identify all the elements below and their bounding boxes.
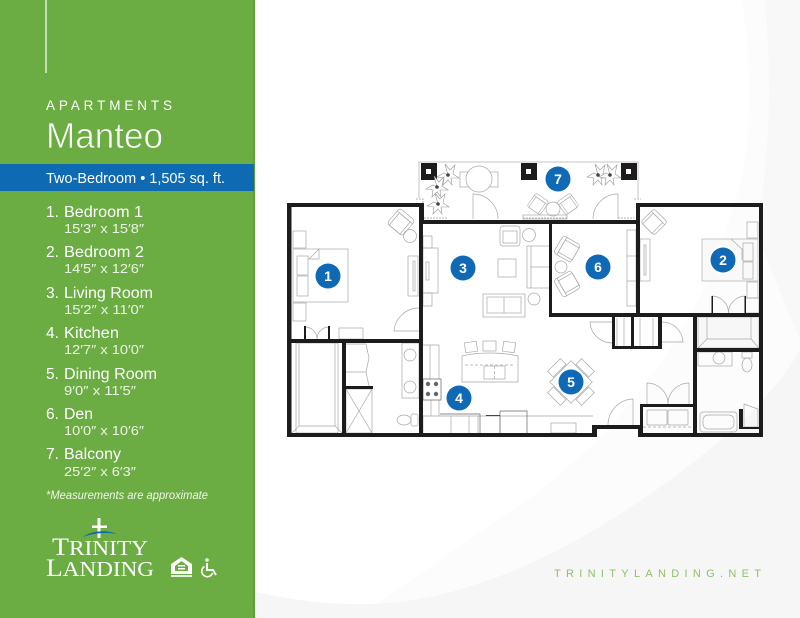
band: unit type: Two-Bedroom • 1,505 sq. ft.: [46, 171, 225, 187]
badge 3: 3: [459, 260, 467, 276]
second bathroom: [698, 317, 759, 432]
bedroom 2 and right walls: [636, 203, 763, 437]
badge 2: [709, 246, 737, 274]
badge 7: [544, 165, 572, 193]
balcony table: [460, 166, 498, 192]
room 5: Dining Room: [64, 366, 157, 383]
living room furniture: [423, 226, 550, 317]
room 6: Den: [64, 406, 93, 423]
bottom walls: [287, 404, 763, 437]
balcony outline: [419, 162, 638, 198]
badge 5: [557, 368, 585, 396]
badge 1: [314, 262, 342, 290]
bedroom 1 furniture: [293, 208, 419, 339]
badge 6: [584, 253, 612, 281]
badge 1: 1: [324, 268, 332, 284]
logo: Trinity Landing: TRINITY: [52, 534, 148, 561]
room 3: Living Room: [64, 285, 153, 302]
room 3: [46, 285, 153, 317]
room 5: 9′0″ x 11′5″: [64, 384, 137, 398]
band: unit type: [0, 164, 254, 191]
room 7: Balcony: [64, 446, 121, 463]
room 4: 4.: [46, 325, 59, 342]
room 4: Kitchen: [64, 325, 119, 342]
background swoosh: bottom: [255, 350, 800, 618]
kitchen island with stools: [462, 341, 518, 382]
accent line: [45, 0, 47, 73]
heading: Manteo: Manteo: [46, 115, 163, 156]
living and den walls: [420, 203, 763, 317]
panel: green sidebar: [0, 0, 255, 618]
balcony doors: [473, 194, 618, 219]
list: room dimensions: [46, 204, 157, 479]
kitchen: [423, 345, 593, 433]
heading: apartments: APARTMENTS: [46, 98, 172, 113]
room 6: 10′0″ x 10′6″: [64, 424, 145, 438]
closet walls: [612, 316, 662, 349]
badge 7: 7: [554, 171, 562, 187]
room 1: 15′3″ x 15′8″: [64, 222, 145, 236]
icon: wheelchair: [202, 558, 216, 577]
badge 2: 2: [719, 252, 727, 268]
range: [423, 379, 441, 400]
background swoosh: upper right light band: [373, 0, 800, 618]
badge 3: [449, 254, 477, 282]
room 2: 2.: [46, 244, 59, 261]
room 5: 5.: [46, 366, 59, 383]
logo: Trinity Landing: LANDING: [46, 555, 154, 582]
icon: equal housing: [171, 557, 192, 577]
footnote: *Measurements are approximate: [46, 488, 208, 502]
room 6: 6.: [46, 406, 59, 423]
room 1: 1.: [46, 204, 59, 221]
room 1: Bedroom 1: [64, 204, 143, 221]
badge 4: 4: [455, 390, 463, 406]
room 2: Bedroom 2: [64, 244, 144, 261]
exterior and interior walls: [287, 203, 763, 437]
room 1: [46, 204, 145, 236]
bedroom 2 furniture: [640, 209, 759, 313]
room 7: 25′2″ x 6′3″: [64, 465, 137, 479]
badge 4: [445, 384, 473, 412]
den furniture: [553, 230, 636, 306]
room 4: [46, 325, 145, 357]
badge 6: 6: [594, 259, 602, 275]
room 5: [46, 366, 157, 398]
room 2: 14′5″ x 12′6″: [64, 262, 145, 276]
room 7: 7.: [46, 446, 59, 463]
room 7: [46, 446, 137, 479]
room 4: 12′7″ x 10′0″: [64, 343, 145, 357]
room 2: [46, 244, 145, 276]
bedroom 1 walls: [287, 203, 424, 437]
balcony: [416, 162, 641, 219]
background swoosh: upper right edge: [755, 0, 800, 340]
room 6: [46, 406, 145, 438]
balcony seating: [523, 193, 579, 219]
closets, doors and laundry: [590, 318, 693, 427]
floor plan: [287, 162, 763, 437]
master bath and closet: [292, 343, 419, 433]
room 3: 3.: [46, 285, 59, 302]
balcony pillars: [421, 163, 637, 180]
website url: TRINITYLANDING.NET: [554, 568, 761, 580]
dining table: [537, 348, 605, 433]
room 3: 15′2″ x 11′0″: [64, 303, 145, 317]
balcony plants: [426, 164, 621, 214]
badge 5: 5: [567, 374, 575, 390]
fridge and counter units: [500, 411, 527, 433]
logo: Trinity Landing: [46, 518, 154, 582]
